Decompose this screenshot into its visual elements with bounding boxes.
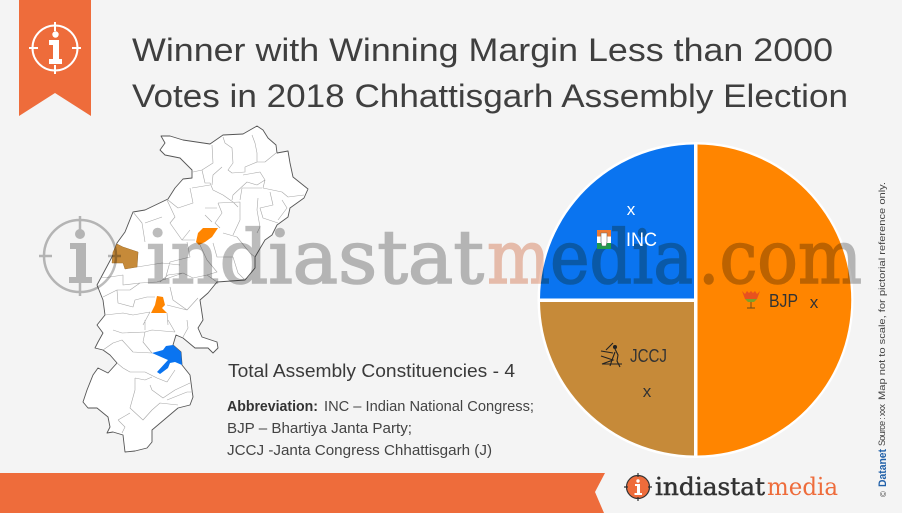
total constituencies: Total Assembly Constituencies - 4 — [228, 361, 515, 381]
map: BJP constituency north — [196, 228, 218, 245]
watermark icon — [39, 216, 121, 296]
side credit: Source : xxx — [877, 404, 887, 446]
side credit: Map not to scale, for pictorial reference only. — [877, 182, 888, 400]
watermark: .com — [698, 215, 862, 301]
pie labels — [597, 200, 819, 401]
side credit — [877, 182, 889, 497]
map: BJP constituency central — [151, 296, 167, 313]
watermark: media — [487, 215, 693, 301]
icon: INC flag — [597, 230, 611, 249]
footer band — [0, 473, 605, 513]
abbreviations: INC – Indian National Congress; — [324, 398, 534, 415]
pie slice: JCCJ — [540, 302, 694, 455]
label: BJP: BJP — [769, 291, 798, 311]
abbreviations: BJP – Bhartiya Janta Party; — [227, 420, 412, 437]
title: Votes in 2018 Chhattisgarh Assembly Election — [132, 78, 848, 114]
footer logo — [624, 473, 838, 501]
icon: ribbon with info target — [19, 0, 91, 116]
label: JCCJ value: x — [643, 382, 652, 401]
map outline — [83, 126, 308, 452]
pie chart — [538, 142, 854, 458]
side credit: Datanet — [877, 449, 889, 487]
map: JCCJ constituency — [112, 244, 138, 269]
watermark text: indiastat — [146, 215, 484, 301]
abbreviations: JCCJ -Janta Congress Chhattisgarh (J) — [227, 442, 492, 459]
pie slice: BJP — [698, 145, 851, 455]
label: JCCJ: JCCJ — [630, 346, 667, 366]
icon: BJP lotus — [742, 291, 760, 308]
map: Chhattisgarh constituencies — [83, 126, 308, 452]
label: INC value: x — [627, 200, 636, 219]
map: constituency boundaries — [100, 135, 304, 433]
side credit: © — [879, 491, 888, 497]
logo icon — [624, 473, 652, 501]
icon: JCCJ farmer — [601, 343, 622, 367]
title: Winner with Winning Margin Less than 2000 — [132, 32, 833, 68]
abbreviations: Abbreviation: — [227, 398, 318, 415]
watermark — [39, 215, 862, 301]
abbreviations — [227, 398, 534, 459]
footer logo: media — [767, 473, 838, 501]
map: INC constituency — [152, 345, 182, 374]
logo text: indiastat — [655, 473, 765, 501]
label: BJP value: x — [810, 293, 819, 312]
pie slice: INC — [540, 145, 694, 298]
label: INC: INC — [626, 230, 657, 251]
title — [132, 32, 848, 114]
